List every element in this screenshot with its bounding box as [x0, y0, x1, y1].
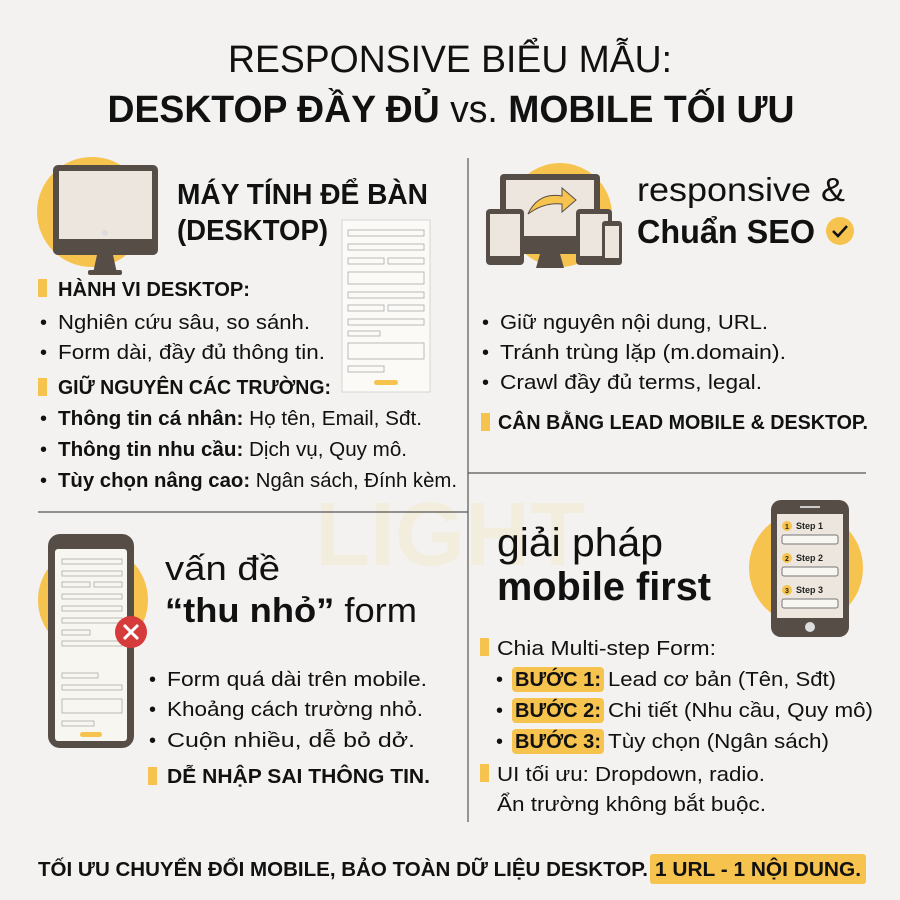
icon: multi-step phone: Step 3 [796, 585, 823, 595]
watermark: LIGHT [315, 485, 585, 585]
text: shrink bullets: Khoảng cách trường nhỏ. [167, 699, 423, 721]
text: multi-step bullets: Chia Multi-step Form: [497, 638, 716, 660]
text: desktop behaviour: Thông tin nhu cầu: Dịch vụ, Quy mô. [58, 439, 407, 461]
text: desktop behaviour: • [40, 312, 47, 334]
icon: multi-step phone [749, 500, 863, 637]
title: RESPONSIVE BIỂU MẪU: [228, 36, 672, 81]
panel: mobile first [480, 500, 873, 816]
heading: responsive: responsive & [637, 171, 845, 208]
text: seo bullets: Giữ nguyên nội dung, URL. [500, 312, 768, 334]
text: desktop behaviour: • [40, 342, 47, 364]
text: desktop behaviour: Thông tin cá nhân: Họ tên, Email, Sđt. [58, 408, 422, 430]
title: DESKTOP ĐẦY ĐỦ vs. MOBILE TỐI ƯU [108, 86, 794, 131]
panel: responsive SEO [481, 163, 868, 434]
icon: multi-step phone: Step 2 [796, 553, 823, 563]
heading: mobile first: giải pháp [497, 521, 663, 565]
icon: phone with long form [38, 534, 148, 748]
text: multi-step bullets: Chi tiết (Nhu cầu, Quy mô) [608, 700, 873, 722]
text: multi-step bullets: Lead cơ bản (Tên, Sđt) [608, 669, 836, 691]
icon: multi-step phone: Step 1 [796, 521, 823, 531]
icon: multi-step phone: 1 [785, 524, 789, 531]
text: seo bullets: • [482, 372, 489, 394]
text: multi-step bullets: BƯỚC 1: [515, 667, 601, 691]
text: desktop behaviour: GIỮ NGUYÊN CÁC TRƯỜNG: [58, 375, 331, 399]
text: shrink bullets: DỄ NHẬP SAI THÔNG TIN. [167, 764, 430, 788]
form mockup [342, 220, 430, 392]
text: shrink bullets: • [149, 730, 156, 752]
text: multi-step bullets: • [496, 731, 503, 753]
heading: desktop [177, 177, 428, 247]
heading: desktop: (DESKTOP) [177, 215, 328, 247]
text: seo bullets: • [482, 312, 489, 334]
icon: red x [115, 616, 147, 648]
text: desktop behaviour: Nghiên cứu sâu, so sánh. [58, 312, 310, 334]
text: desktop behaviour: Tùy chọn nâng cao: Ngân sách, Đính kèm. [58, 470, 457, 492]
icon: devices [486, 163, 622, 268]
text: desktop behaviour [38, 278, 457, 492]
panel: shrink problem [38, 534, 430, 788]
text: seo bullets: Tránh trùng lặp (m.domain). [500, 342, 786, 364]
title [108, 36, 794, 131]
heading: shrink [165, 550, 417, 630]
icon: multi-step phone: 2 [785, 556, 789, 563]
panel: desktop [37, 157, 457, 492]
text: multi-step bullets: Tùy chọn (Ngân sách) [608, 731, 829, 753]
icon: monitor [37, 157, 158, 275]
heading: mobile first: mobile first [497, 565, 711, 609]
text: multi-step bullets: UI tối ưu: Dropdown, radio. [497, 764, 765, 786]
text: multi-step bullets: • [496, 669, 503, 691]
footer: 1 URL - 1 NỘI DUNG. [655, 857, 861, 881]
text: seo bullets: • [482, 342, 489, 364]
text: desktop behaviour: HÀNH VI DESKTOP: [58, 278, 250, 301]
icon: multi-step phone: 3 [785, 588, 789, 595]
text: desktop behaviour: • [40, 408, 47, 430]
text: desktop behaviour: • [40, 439, 47, 461]
footer: TỐI ƯU CHUYỂN ĐỔI MOBILE, BẢO TOÀN DỮ LIỆU DESKTOP. [38, 857, 648, 881]
icon: check [826, 217, 854, 245]
text: seo bullets: Crawl đầy đủ terms, legal. [500, 372, 762, 394]
heading: desktop: MÁY TÍNH ĐỂ BÀN [177, 177, 428, 211]
text: desktop behaviour: • [40, 470, 47, 492]
text: multi-step bullets: BƯỚC 3: [515, 729, 601, 753]
text: seo bullets [481, 312, 868, 434]
text: shrink bullets: Form quá dài trên mobile. [167, 669, 427, 691]
text: shrink bullets: • [149, 699, 156, 721]
heading: responsive: Chuẩn SEO [637, 213, 815, 250]
text: multi-step bullets [480, 638, 873, 816]
heading: responsive [637, 171, 854, 250]
text: shrink bullets: • [149, 669, 156, 691]
footer [38, 854, 866, 884]
text: shrink bullets [148, 669, 430, 788]
text: multi-step bullets: BƯỚC 2: [515, 698, 601, 722]
heading: shrink: vấn đề [165, 550, 280, 588]
text: shrink bullets: Cuộn nhiều, dễ bỏ dở. [167, 729, 415, 752]
heading: shrink: “thu nhỏ” form [165, 592, 417, 630]
heading: mobile first [497, 521, 711, 609]
text: multi-step bullets: Ẩn trường không bắt buộc. [497, 793, 766, 816]
text: seo bullets: CÂN BẰNG LEAD MOBILE & DESKTOP. [498, 410, 868, 434]
text: multi-step bullets: • [496, 700, 503, 722]
text: desktop behaviour: Form dài, đầy đủ thông tin. [58, 342, 325, 364]
